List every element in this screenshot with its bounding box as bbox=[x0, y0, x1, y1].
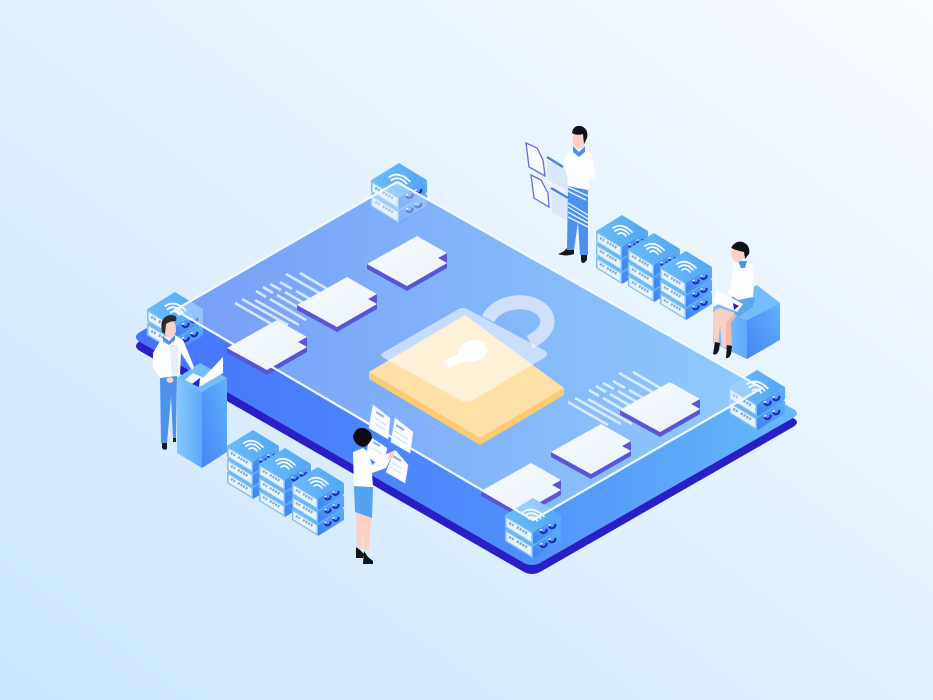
laptop bbox=[713, 290, 743, 312]
document outlines bbox=[526, 143, 549, 207]
corner server: bottom bbox=[505, 498, 561, 558]
trousers bbox=[567, 186, 588, 255]
hand bbox=[387, 450, 395, 459]
shirt bbox=[153, 335, 194, 378]
server rack group: top right bbox=[596, 215, 712, 320]
face bbox=[732, 246, 744, 262]
collar bbox=[163, 335, 175, 345]
face bbox=[164, 320, 176, 338]
yellow lock base bbox=[369, 315, 564, 445]
trousers bbox=[160, 376, 177, 443]
shirt bbox=[563, 148, 596, 190]
skirt bbox=[730, 297, 755, 317]
hand bbox=[166, 377, 174, 383]
panel lines over trousers bbox=[568, 187, 588, 227]
person: man at podium bbox=[153, 315, 223, 450]
collar bbox=[573, 146, 585, 157]
server rack group: bottom left bbox=[227, 430, 344, 536]
far leg bbox=[722, 313, 737, 348]
document cards: right group bbox=[481, 382, 700, 518]
translucent panels bbox=[547, 160, 570, 222]
padlock bbox=[369, 302, 564, 445]
panel title bars bbox=[547, 157, 568, 198]
seat cube bbox=[713, 285, 780, 359]
keyhole bbox=[443, 340, 487, 367]
corner server: top bbox=[371, 163, 427, 223]
shoes bbox=[558, 248, 587, 263]
person: man with floating documents bbox=[526, 126, 596, 263]
podium bbox=[177, 363, 227, 468]
corner server: right bbox=[729, 370, 785, 430]
platform base bbox=[136, 182, 797, 574]
shoes bbox=[162, 437, 176, 450]
text stripes: left documents bbox=[235, 273, 334, 326]
near leg bbox=[713, 308, 735, 348]
person: woman with paper sheets bbox=[353, 405, 413, 564]
glass lock body bbox=[381, 308, 547, 402]
person: seated woman with laptop bbox=[713, 242, 755, 358]
sheet connector bbox=[388, 442, 396, 450]
collar bbox=[738, 261, 747, 268]
legs bbox=[356, 512, 371, 550]
shoes bbox=[356, 547, 373, 564]
platform glass surface bbox=[175, 182, 762, 520]
paper sheets bbox=[366, 405, 413, 483]
platform white outline bbox=[175, 182, 762, 520]
laptop bbox=[185, 357, 223, 387]
lock shackle bbox=[488, 302, 548, 342]
skirt bbox=[354, 486, 373, 518]
hair bbox=[161, 315, 176, 334]
corner server: left bbox=[147, 292, 203, 352]
document cards: left group bbox=[227, 236, 447, 375]
hair bbox=[353, 428, 372, 447]
hair bbox=[572, 126, 587, 144]
shoes bbox=[713, 342, 732, 358]
glass tint over corner servers bbox=[177, 184, 760, 518]
hair bbox=[731, 242, 749, 259]
sheet lines bbox=[373, 412, 404, 461]
shirt bbox=[728, 263, 754, 300]
text stripes: right documents bbox=[568, 372, 667, 425]
head bbox=[572, 130, 586, 148]
shirt shading bbox=[170, 345, 179, 376]
shirt bbox=[353, 448, 392, 487]
